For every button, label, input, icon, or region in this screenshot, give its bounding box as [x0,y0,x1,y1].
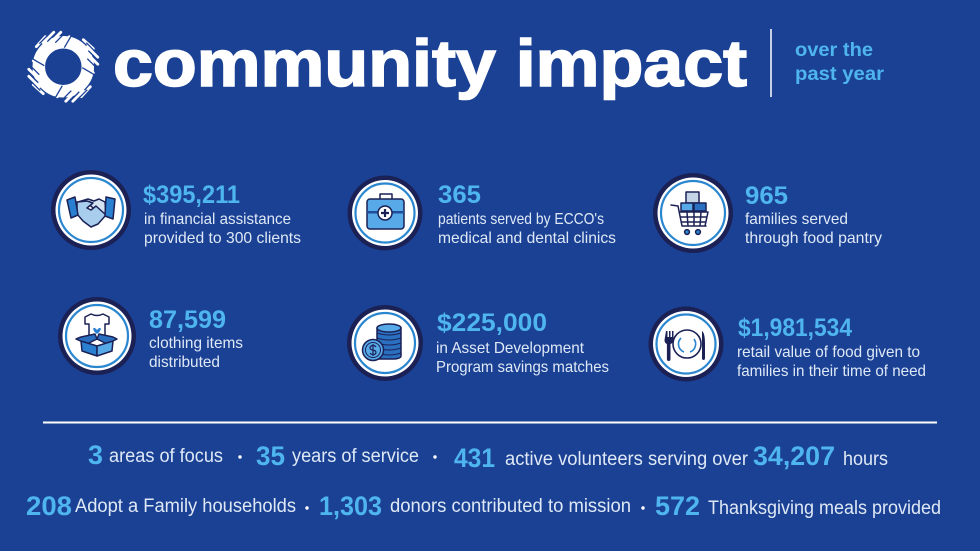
icon: coins [347,305,423,381]
description: through food pantry [745,230,882,247]
summary row 2 [26,491,941,521]
description: provided to 300 clients [144,230,301,247]
description: patients served by ECCO's [438,211,604,228]
description: retail value of food given to [737,344,920,361]
icon: shopping cart [653,173,733,253]
summary row 1: areas of focus [109,446,223,467]
title: community impact [113,26,747,100]
description: in Asset Development [436,340,585,357]
stat: savings matches [347,305,609,381]
figure: 365 [438,181,481,209]
stat: financial assistance [51,170,301,250]
summary row 2: 208 [26,491,72,521]
summary row 1 [88,440,888,473]
subtitle: over the past year [795,40,885,85]
summary row 1: 3 [88,440,103,470]
description: clothing items [149,335,243,352]
icon: medical kit [348,176,422,250]
stat: retail value of food [648,306,926,382]
logo: four hands in a circle [28,32,98,102]
description [436,340,609,376]
description: families in their time of need [737,363,926,380]
description: in financial assistance [144,211,291,228]
description [438,211,616,247]
icon: plate and cutlery [648,306,724,382]
subtitle: over the past year: past year [795,64,885,85]
summary row 1: years of service [292,446,419,467]
description: distributed [149,354,220,371]
subtitle: over the past year: over the [795,40,873,61]
stat: food pantry families [653,173,882,253]
summary row 1: 431 [454,443,495,473]
description [737,344,926,380]
figure: 87,599 [149,306,226,334]
description [144,211,301,247]
summary row 1: 34,207 [753,441,835,471]
summary row 2: donors contributed to mission [390,496,631,517]
description: Program savings matches [436,359,609,376]
figure: $1,981,534 [738,314,852,342]
description [149,335,243,371]
summary row 2: Thanksgiving meals provided [708,498,941,519]
figure: $225,000 [437,309,547,337]
figure: 965 [745,182,788,210]
summary row 2: Adopt a Family households [75,496,296,517]
icon: clothing box [58,297,136,375]
summary row 1: active volunteers serving over [505,449,749,470]
summary row 1: hours [843,449,888,470]
summary row 2: 1,303 [319,491,382,521]
description: families served [745,211,848,228]
stat: clothing items [58,297,243,375]
description [745,211,882,247]
summary row 1: 35 [256,441,285,471]
summary row 2: 572 [655,491,700,521]
stat: medical and dental patients [348,176,616,250]
figure: $395,211 [143,181,240,209]
description: medical and dental clinics [438,230,616,247]
icon: handshake [51,170,131,250]
